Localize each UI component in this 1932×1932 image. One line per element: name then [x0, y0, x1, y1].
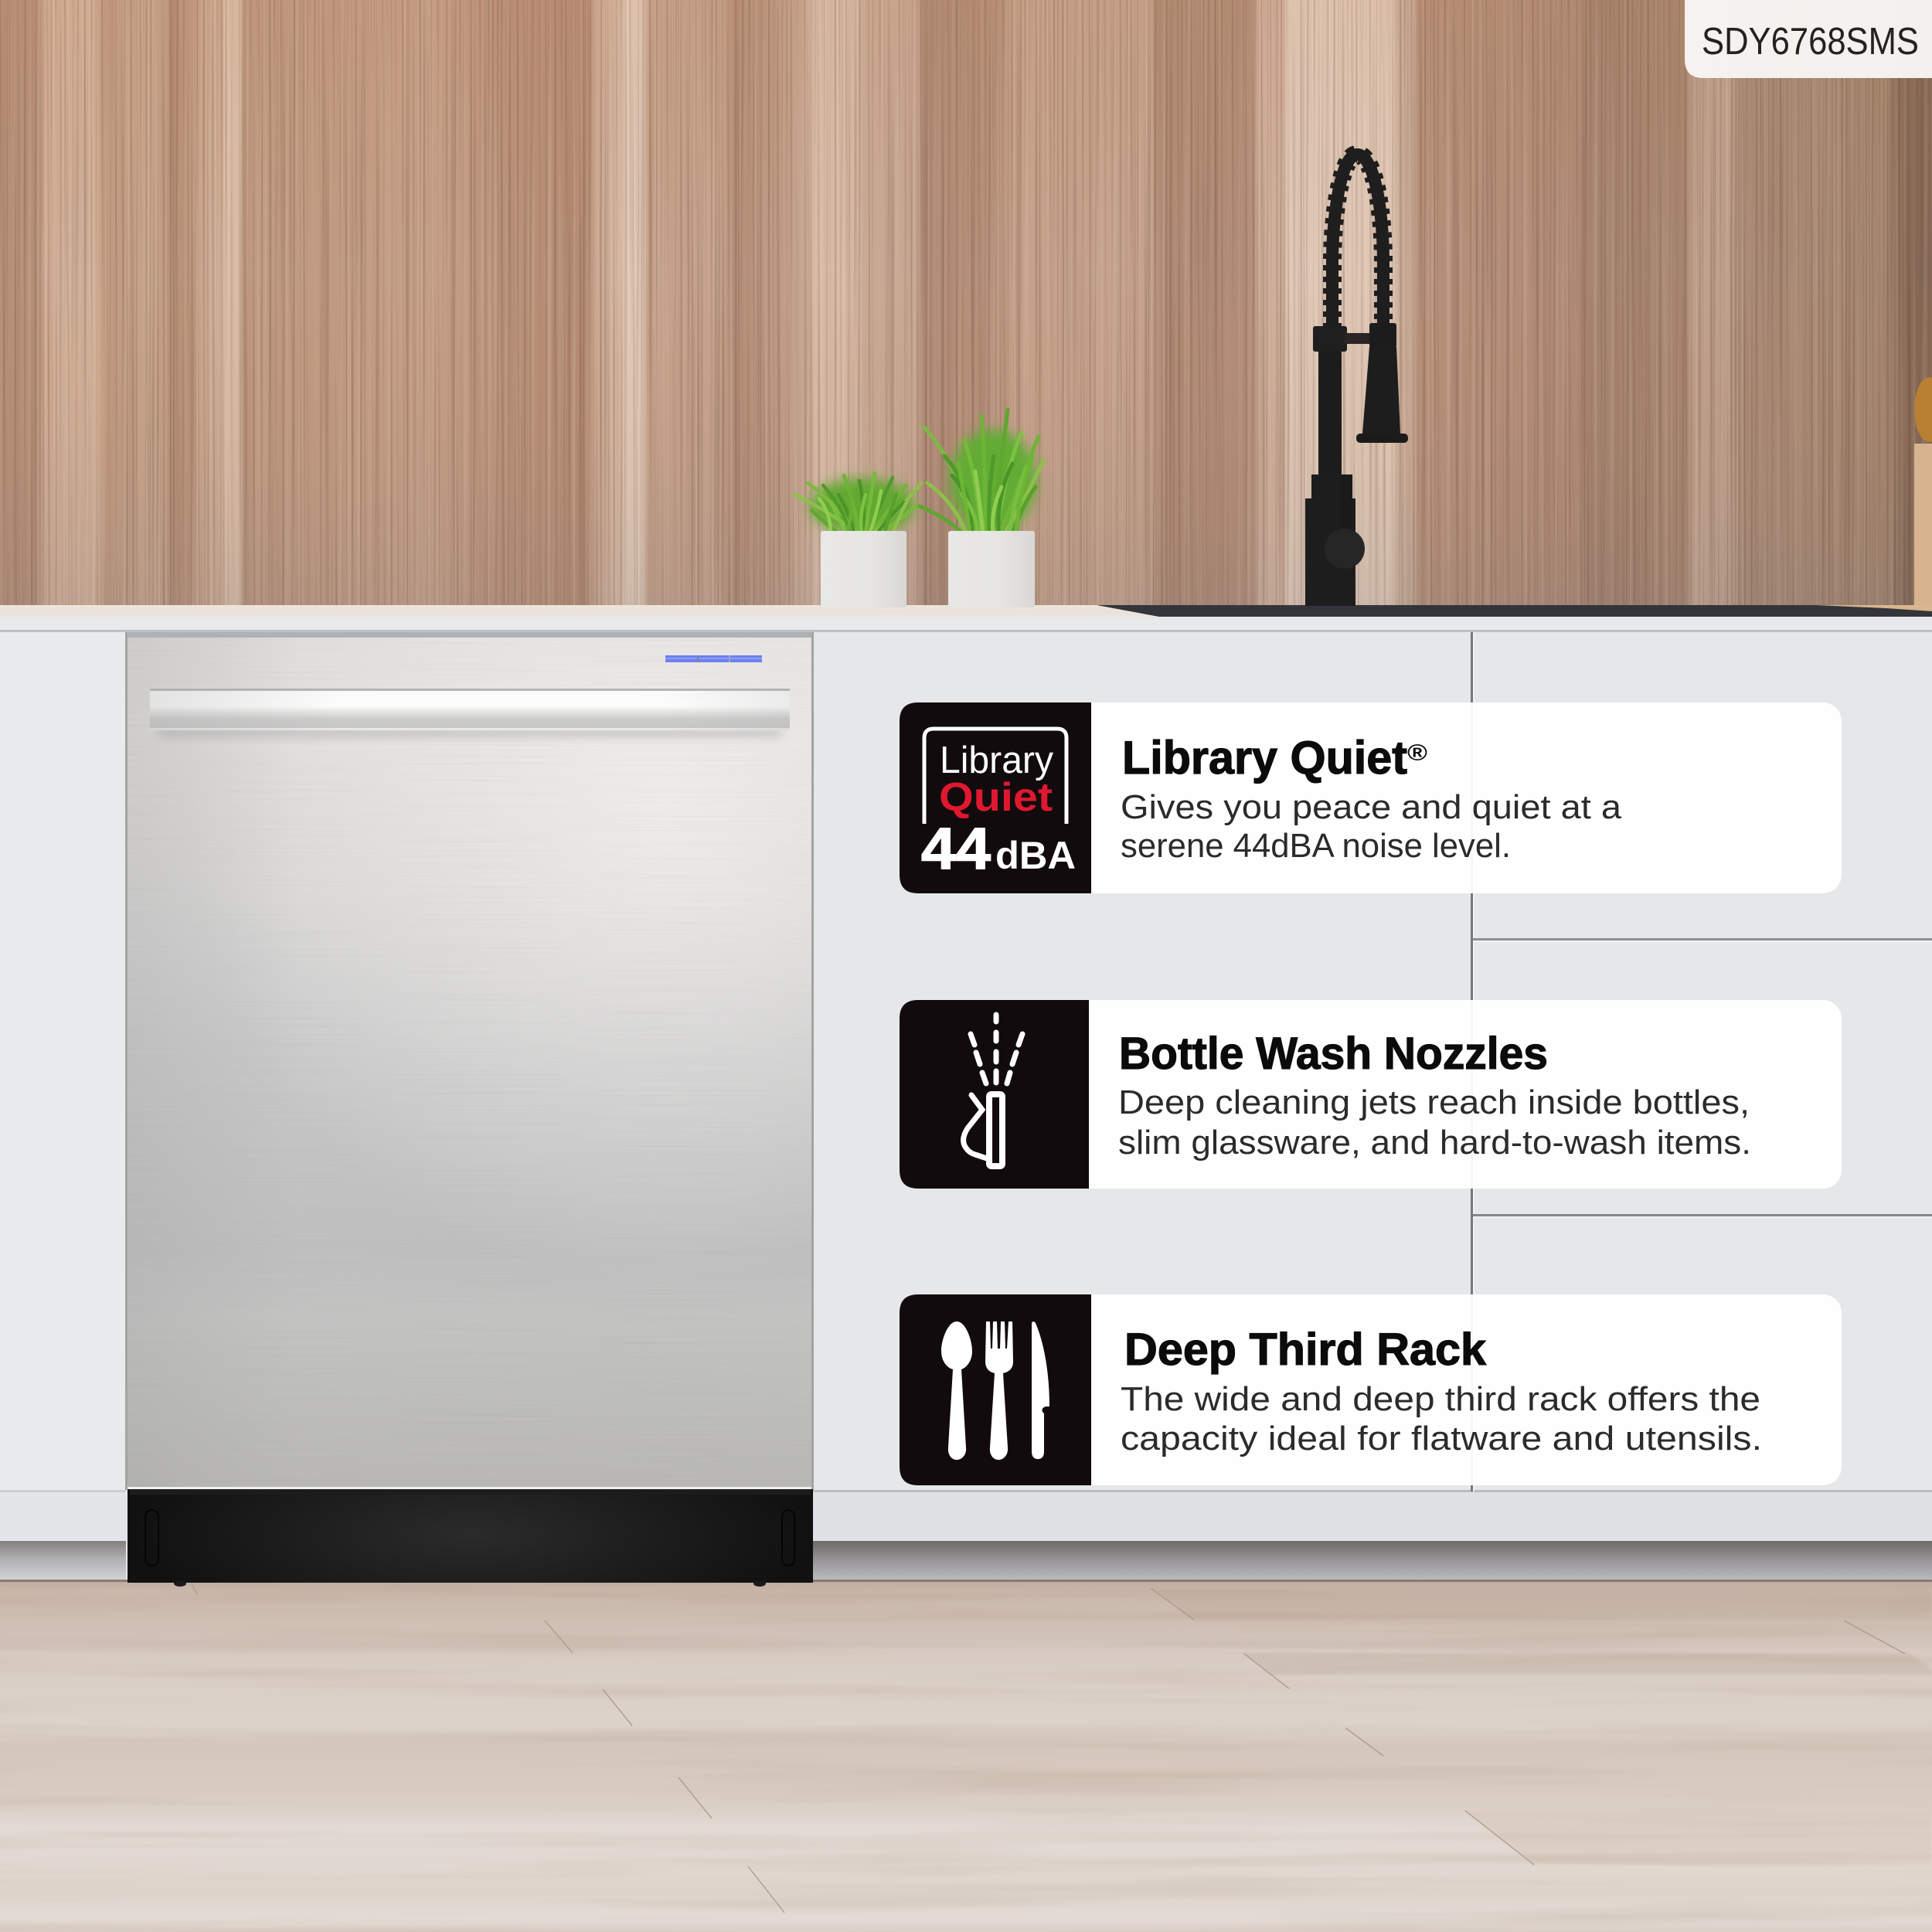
icon: bottle with water jets [900, 1000, 1089, 1189]
control lights [665, 655, 762, 662]
black faucet [1305, 155, 1408, 606]
description [1118, 1083, 1751, 1162]
feature card: Bottle Wash Nozzles [900, 1000, 1842, 1189]
icon: Library Quiet 44dBA badge [900, 702, 1091, 893]
description [1121, 1380, 1762, 1458]
potted plant left [794, 473, 921, 534]
model number tag [1685, 0, 1932, 78]
icon: Library Quiet 44dBA badge: Library [940, 740, 1053, 781]
card background [900, 1000, 1842, 1189]
feature card: Library Quiet [900, 702, 1842, 893]
black toe kick [128, 1489, 813, 1587]
door handle [150, 689, 790, 736]
heading: ® [1407, 740, 1427, 766]
description: The wide and deep third rack offers the [1121, 1380, 1760, 1418]
description: slim glassware, and hard-to-wash items. [1118, 1124, 1751, 1162]
icon: Library Quiet 44dBA badge: 44 [921, 816, 991, 882]
potted plant right [920, 410, 1043, 533]
feature card: Deep Third Rack [900, 1294, 1842, 1485]
sink [1097, 605, 1932, 617]
description: Deep cleaning jets reach inside bottles, [1118, 1083, 1750, 1121]
heading: Bottle Wash Nozzles [1119, 1029, 1548, 1079]
wood floor [0, 1580, 1932, 1932]
countertop [0, 605, 1932, 632]
description: serene 44dBA noise level. [1121, 827, 1511, 865]
heading: Library Quiet [1122, 732, 1407, 784]
dishwasher door panel [125, 632, 814, 1490]
description: capacity ideal for flatware and utensils. [1121, 1420, 1762, 1458]
utensil holder at right edge [1914, 377, 1932, 606]
icon: Library Quiet 44dBA badge: Quiet [939, 775, 1053, 820]
card background [900, 702, 1842, 893]
wood panel wall [0, 0, 1932, 606]
pot right [948, 531, 1035, 607]
pot left [821, 531, 906, 607]
heading: Deep Third Rack [1124, 1325, 1487, 1375]
icon: spoon, fork and knife [900, 1294, 1091, 1485]
left cabinet [0, 632, 126, 1580]
right cabinets [813, 632, 1932, 1580]
icon: Library Quiet 44dBA badge: dBA [995, 834, 1076, 877]
description: Gives you peace and quiet at a [1121, 788, 1622, 826]
description [1121, 788, 1622, 865]
card background [900, 1294, 1842, 1485]
dishwasher [125, 632, 814, 1587]
